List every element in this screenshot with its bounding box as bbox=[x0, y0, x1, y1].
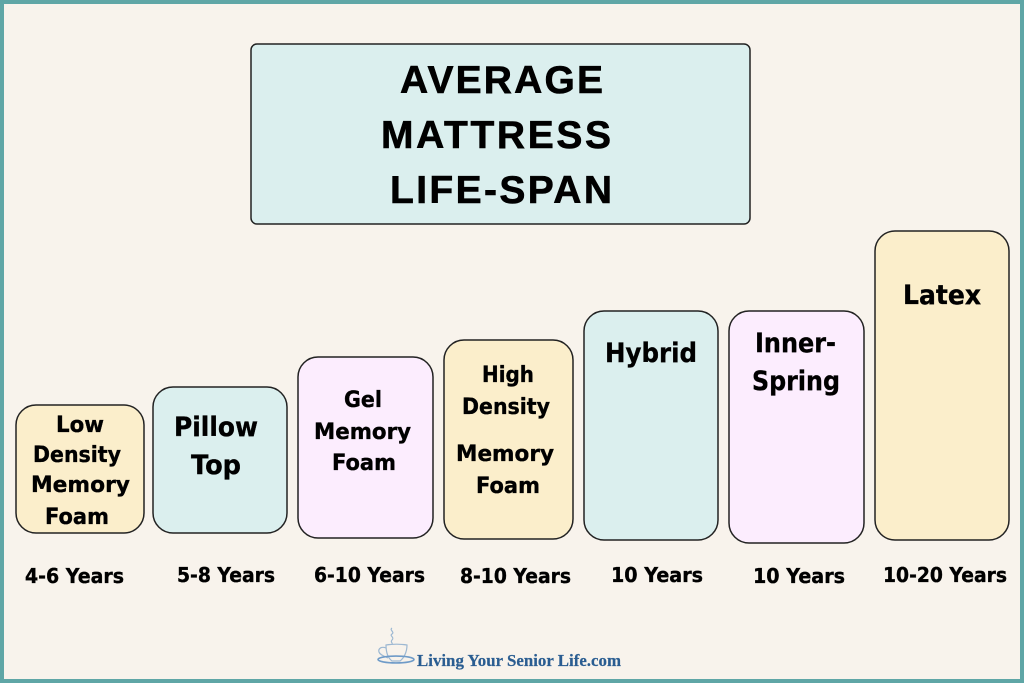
bar: hybrid: Hybrid bbox=[605, 338, 697, 369]
year labels: 10 Years bbox=[611, 563, 703, 587]
bar: high density memory foam: Memory bbox=[456, 441, 554, 467]
title text: AVERAGE bbox=[400, 59, 603, 102]
bar: inner-spring: Spring bbox=[752, 366, 840, 397]
title panel bbox=[251, 44, 750, 224]
year labels: 4-6 Years bbox=[25, 564, 124, 588]
title text: LIFE-SPAN bbox=[390, 169, 612, 212]
bar: high density memory foam: Density bbox=[462, 394, 550, 420]
title text: MATTRESS bbox=[381, 114, 611, 157]
logo text: Living Your Senior Life.com bbox=[417, 651, 621, 670]
bar: high density memory foam: Foam bbox=[476, 473, 540, 499]
icon: tea cup logo bbox=[378, 628, 414, 663]
year labels: 10 Years bbox=[753, 564, 845, 588]
year labels: 5-8 Years bbox=[177, 563, 275, 587]
bar: gel memory foam: Memory bbox=[314, 419, 411, 445]
bar: hybrid bbox=[584, 311, 718, 540]
bar: inner-spring bbox=[729, 311, 864, 543]
bar: low density memory foam: Memory bbox=[31, 472, 130, 498]
bar: latex bbox=[875, 231, 1009, 540]
year labels: 10-20 Years bbox=[883, 563, 1007, 587]
bar: high density memory foam bbox=[444, 340, 573, 539]
bar: low density memory foam: Low bbox=[56, 412, 104, 438]
bar: gel memory foam bbox=[298, 357, 433, 538]
bar: gel memory foam: Gel bbox=[344, 387, 382, 413]
bar: low density memory foam bbox=[16, 405, 144, 533]
title text bbox=[381, 59, 612, 212]
year labels: 8-10 Years bbox=[460, 564, 571, 588]
bar: low density memory foam: Foam bbox=[45, 504, 109, 530]
bar: latex: Latex bbox=[903, 280, 981, 311]
bar: gel memory foam: Foam bbox=[332, 450, 396, 476]
year labels bbox=[25, 563, 1007, 588]
bar: inner-spring: Inner- bbox=[755, 328, 836, 359]
year labels: 6-10 Years bbox=[314, 563, 425, 587]
bar: pillow top: Pillow bbox=[174, 412, 258, 443]
bar: pillow top: Top bbox=[191, 450, 241, 481]
bar: pillow top bbox=[153, 387, 287, 533]
bar: high density memory foam: High bbox=[482, 362, 534, 388]
bar: low density memory foam: Density bbox=[33, 442, 121, 468]
